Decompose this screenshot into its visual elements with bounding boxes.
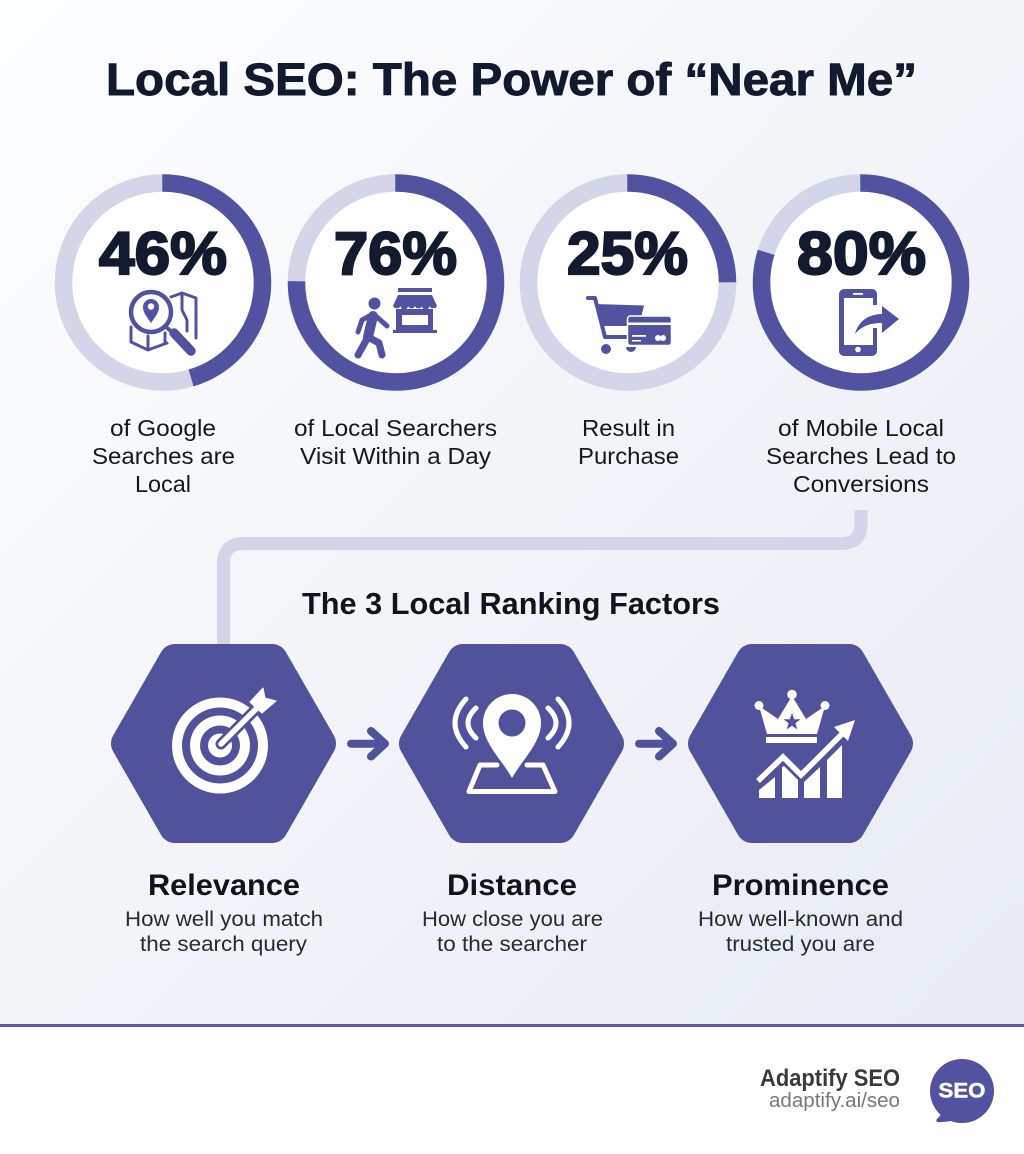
value 25%: 25% bbox=[567, 220, 688, 287]
label 76%: Visit Within a Day bbox=[300, 443, 492, 469]
description relevance bbox=[125, 908, 323, 956]
heading: ranking factors: The 3 Local Ranking Factors bbox=[302, 586, 720, 621]
connector line from stats to factors bbox=[224, 510, 861, 650]
value 76%: 76% bbox=[334, 220, 457, 287]
icon: location pin with signal waves bbox=[455, 694, 569, 792]
icon: crown and rising chart bbox=[754, 690, 855, 798]
panel: distance factor bbox=[415, 660, 608, 956]
value 46%: 46% bbox=[99, 220, 227, 287]
panel: 76% stat bbox=[294, 183, 497, 469]
description relevance: the search query bbox=[140, 933, 308, 956]
hexagon relevance bbox=[127, 660, 320, 827]
value 80%: 80% bbox=[797, 220, 926, 287]
icon: map with magnifier bbox=[131, 292, 196, 351]
label 25% bbox=[578, 415, 679, 469]
label 76%: of Local Searchers bbox=[294, 415, 497, 441]
label 46%: Searches are bbox=[92, 443, 235, 469]
description prominence: How well-known and bbox=[698, 908, 903, 931]
arrow: relevance to distance bbox=[351, 731, 385, 756]
label 25%: Result in bbox=[582, 415, 675, 441]
label 46%: Local bbox=[135, 471, 191, 497]
description distance: to the searcher bbox=[437, 933, 587, 956]
description distance: How close you are bbox=[422, 908, 603, 931]
panel: prominence factor bbox=[698, 660, 903, 956]
title: Local SEO: The Power of “Near Me” bbox=[106, 54, 917, 105]
description relevance: How well you match bbox=[125, 908, 323, 931]
donut ring 80% bbox=[762, 183, 960, 382]
hexagon prominence bbox=[704, 660, 897, 827]
description distance bbox=[422, 908, 603, 956]
factor name relevance: Relevance bbox=[148, 869, 300, 902]
brand url: adaptify.ai/seo bbox=[769, 1089, 900, 1112]
label 80%: Searches Lead to bbox=[766, 443, 956, 469]
description prominence bbox=[698, 908, 903, 956]
logo: speech bubble bbox=[930, 1059, 994, 1123]
hexagon distance bbox=[415, 660, 608, 827]
panel: relevance factor bbox=[125, 660, 323, 956]
donut ring 25% bbox=[528, 183, 728, 382]
label 80%: of Mobile Local bbox=[778, 415, 944, 441]
factor name prominence: Prominence bbox=[712, 869, 889, 902]
label 80%: Conversions bbox=[793, 471, 929, 497]
factor name distance: Distance bbox=[447, 869, 577, 902]
panel: 46% stat bbox=[64, 183, 262, 497]
label 46% bbox=[92, 415, 235, 497]
label 46%: of Google bbox=[110, 415, 216, 441]
description prominence: trusted you are bbox=[726, 933, 875, 956]
logo: speech bubble: SEO bbox=[938, 1078, 986, 1102]
footer bbox=[0, 1024, 1024, 1154]
icon: person walking to store bbox=[358, 288, 437, 355]
donut ring 46% bbox=[64, 183, 262, 382]
icon: target with arrow bbox=[172, 688, 276, 794]
icon: phone with arrow bbox=[839, 289, 899, 356]
panel: 25% stat bbox=[528, 183, 728, 469]
donut ring 76% bbox=[296, 183, 496, 382]
panel: 80% stat bbox=[762, 183, 960, 497]
icon: cart and credit card bbox=[588, 298, 672, 354]
brand name: Adaptify SEO bbox=[760, 1065, 900, 1092]
label 80% bbox=[766, 415, 956, 497]
label 25%: Purchase bbox=[578, 443, 679, 469]
arrow: distance to prominence bbox=[639, 731, 673, 756]
label 76% bbox=[294, 415, 497, 469]
